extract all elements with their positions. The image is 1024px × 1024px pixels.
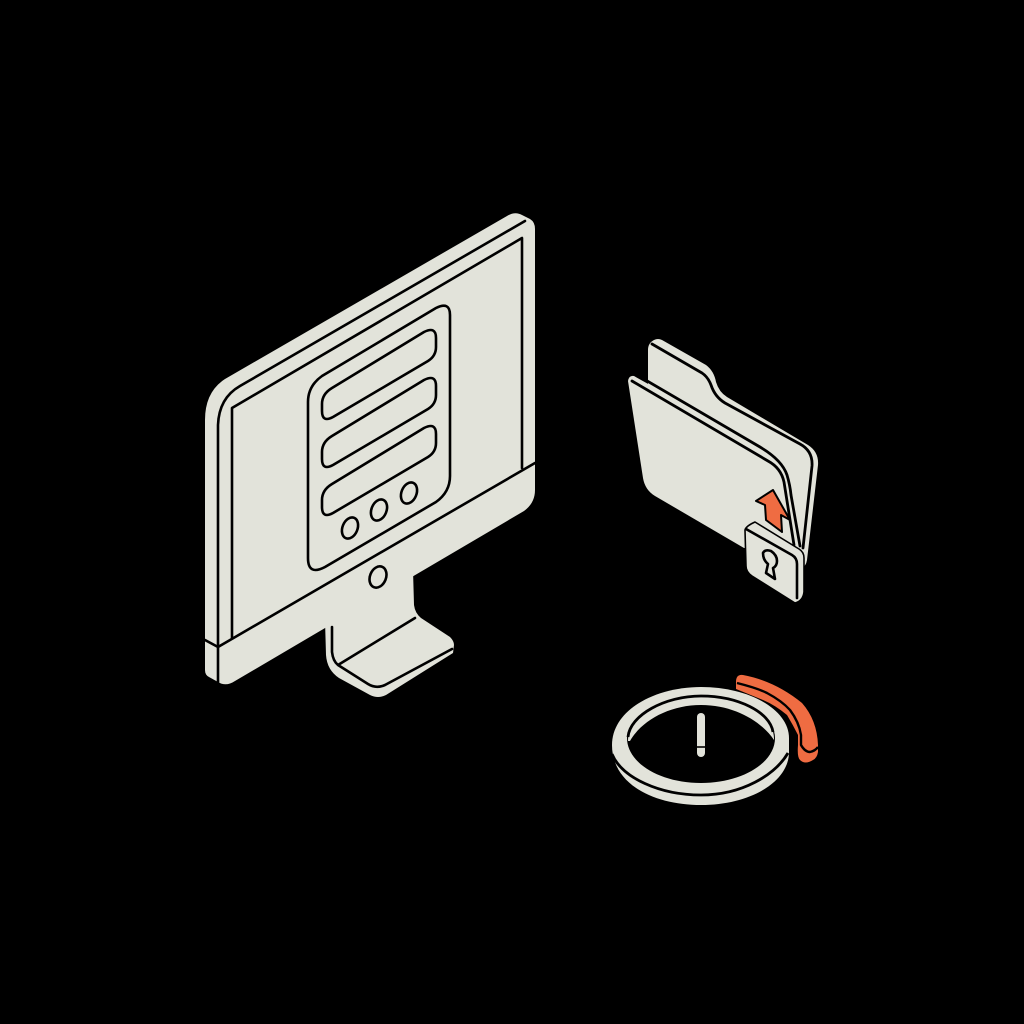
folder outlines (632, 344, 812, 548)
window button 3 (398, 480, 420, 506)
ring front edge line (612, 753, 788, 795)
padlock (745, 522, 804, 603)
monitor body (205, 213, 535, 684)
ring inner top line (628, 696, 773, 737)
list row 1 (322, 330, 436, 419)
ring inner wall (628, 696, 774, 741)
monitor bezel and screen outlines (205, 221, 535, 683)
monitor stand (325, 570, 454, 697)
window button 1 (339, 515, 361, 541)
keyhole (763, 550, 777, 579)
list row 2 (322, 378, 436, 467)
window button 2 (368, 497, 390, 523)
icon: locked folder (628, 339, 818, 603)
icon: desktop monitor (205, 213, 535, 697)
icon: progress ring (612, 675, 818, 805)
upload arrow (756, 490, 790, 532)
orange progress arc (736, 675, 818, 762)
folder front (628, 376, 800, 548)
power button (366, 564, 390, 590)
folder back (648, 339, 818, 568)
app window panel (308, 306, 450, 570)
list row 3 (322, 426, 436, 515)
ring base (612, 687, 789, 805)
ring hole (627, 695, 775, 783)
indicator needle (697, 713, 705, 757)
